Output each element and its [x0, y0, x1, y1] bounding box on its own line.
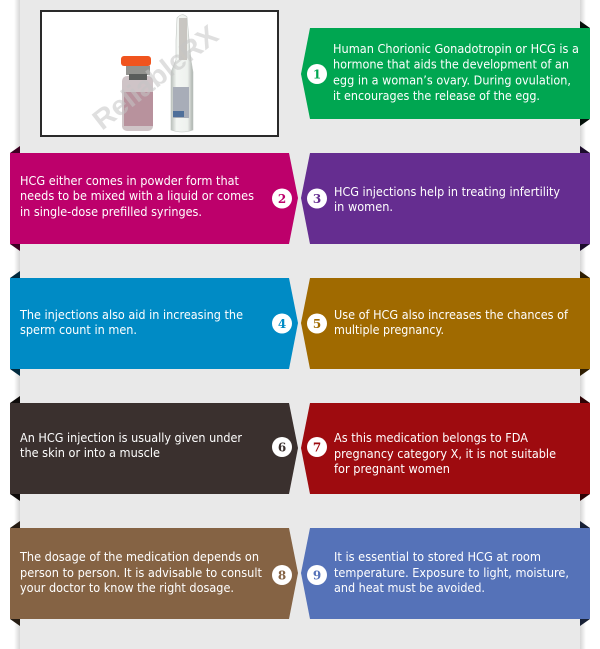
panel 1: green: it encourages the release of the egg. — [333, 88, 540, 103]
panel 8: tan: your doctor to know the right dosage. — [20, 580, 234, 595]
panel 2: magenta: HCG either comes in powder form that — [20, 173, 239, 188]
panel 4: blue: sperm count in men. — [20, 322, 137, 337]
panel 4: blue — [10, 271, 298, 376]
panel 5: ochre: Use of HCG also increases the chances of — [334, 307, 569, 322]
panel 1: green: Human Chorionic Gonadotropin or HCG is a — [333, 41, 579, 56]
panel 6: dark brown: the skin or into a muscle — [20, 445, 160, 460]
panel 2: magenta: 2 — [278, 192, 286, 206]
icon: vial — [121, 56, 153, 131]
panel 8: tan: The dosage of the medication depends on — [19, 549, 259, 564]
icon: ampoule — [171, 15, 193, 132]
panel 7: red: As this medication belongs to FDA — [334, 430, 528, 445]
panel 7: red: 7 — [313, 440, 321, 454]
panel 7: red: pregnancy category X, it is not suitable — [334, 446, 556, 461]
panel 1: green: egg in a woman’s ovary. During ovulation, — [333, 72, 571, 88]
panel 3: purple — [301, 146, 590, 251]
panel 9: slate blue — [301, 521, 590, 626]
panel 2: magenta — [10, 146, 298, 251]
panel 4: blue: 4 — [278, 317, 286, 331]
panel 5: ochre: multiple pregnancy. — [334, 322, 444, 337]
watermark: ReliableRX — [87, 19, 224, 136]
panel 8: tan — [10, 521, 298, 626]
panel 7: red: for pregnant women — [334, 461, 450, 476]
panel 6: dark brown — [10, 396, 298, 501]
panel 9: slate blue: 9 — [313, 568, 321, 582]
panel 2: magenta: in single-dose prefilled syringes. — [20, 204, 202, 219]
panel 3: purple: 3 — [313, 192, 321, 206]
panel 5: ochre — [301, 271, 590, 376]
panel 8: tan: person to person. It is advisable to consult — [20, 565, 262, 580]
panel 8: tan: 8 — [278, 568, 286, 582]
product photo: vial and ampoule — [41, 11, 278, 136]
panel 4: blue: The injections also aid in increasing the — [19, 307, 243, 322]
panel 5: ochre: 5 — [313, 317, 321, 331]
panel 6: dark brown: 6 — [278, 440, 286, 454]
panel 1: green: hormone that aids the development of an — [333, 56, 569, 72]
panel 9: slate blue: temperature. Exposure to light, moisture, — [334, 565, 569, 580]
panel 9: slate blue: It is essential to stored HCG at room — [334, 549, 541, 564]
panel 7: red — [301, 396, 590, 501]
panel 1: green — [301, 21, 590, 126]
panel 3: purple: HCG injections help in treating infertility — [334, 184, 561, 199]
panel 1: green: 1 — [313, 68, 321, 82]
panel 9: slate blue: and heat must be avoided. — [334, 580, 485, 595]
panel 6: dark brown: An HCG injection is usually given under — [20, 430, 243, 445]
panel 3: purple: in women. — [334, 199, 393, 214]
panel 2: magenta: needs to be mixed with a liquid or comes — [20, 188, 254, 203]
